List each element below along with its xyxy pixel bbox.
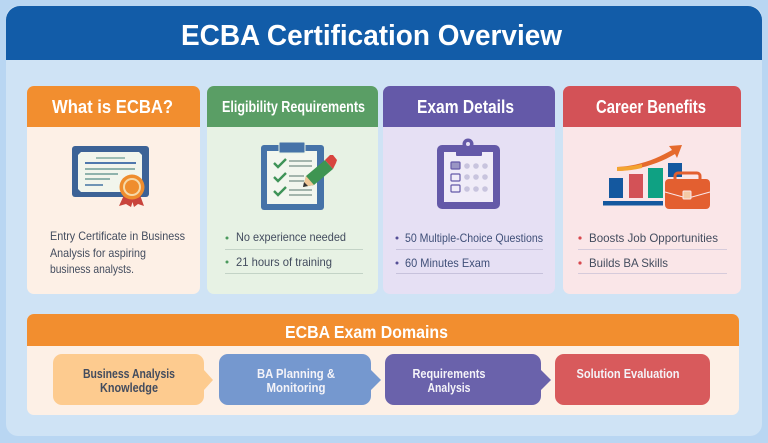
domain: Business Analysis Knowledge: Business Analysis (83, 367, 175, 381)
icon: growth chart and briefcase (603, 145, 710, 209)
text block: ECBA description: business analysts. (50, 262, 134, 276)
heading: ECBA Exam Domains: ECBA Exam Domains (285, 322, 448, 342)
text block: ECBA description (50, 229, 185, 276)
panel: What is ECBA? (27, 86, 200, 294)
domain: BA Planning and Monitoring: Monitoring (266, 381, 326, 395)
domain: Solution Evaluation: Solution Evaluation (576, 367, 680, 381)
domain: Requirements Analysis (385, 354, 551, 405)
domain: Business Analysis Knowledge: Knowledge (100, 381, 158, 395)
list: career benefits: Builds BA Skills (589, 256, 668, 270)
domain: BA Planning and Monitoring: BA Planning & (257, 367, 335, 381)
domain: Requirements Analysis: Requirements (412, 367, 486, 381)
panel: Exam Details (383, 86, 555, 294)
title: ECBA Certification Overview (181, 20, 562, 52)
panel: Eligibility Requirements (207, 86, 378, 294)
icon: clipboard with pencil (261, 142, 337, 210)
list: eligibility: 21 hours of training (236, 255, 332, 269)
list: career benefits (578, 231, 727, 274)
list: exam details: 50 Multiple-Choice Questions (405, 231, 543, 245)
text block: ECBA description: Analysis for aspiring (50, 246, 146, 260)
list: exam details (396, 231, 543, 274)
icon: exam clipboard (437, 138, 500, 209)
heading: Career Benefits: Career Benefits (596, 97, 706, 117)
list: eligibility (225, 230, 363, 274)
domain: Business Analysis Knowledge (53, 354, 213, 405)
list: exam details: 60 Minutes Exam (405, 256, 490, 270)
panel: Career Benefits (563, 86, 741, 294)
icon: certificate (72, 146, 149, 207)
list: career benefits: Boosts Job Opportunities (589, 231, 718, 245)
heading: Eligibility Requirements: Eligibility Requirements (222, 99, 365, 116)
panel: ECBA Exam Domains (27, 314, 739, 415)
domain: Requirements Analysis: Analysis (428, 381, 471, 395)
text block: ECBA description: Entry Certificate in Business (50, 229, 185, 243)
heading: What is ECBA?: What is ECBA? (52, 96, 173, 117)
title banner (6, 6, 762, 60)
list: eligibility: No experience needed (236, 230, 346, 244)
domain: BA Planning and Monitoring (219, 354, 381, 405)
domain: Solution Evaluation (555, 354, 710, 405)
heading: Exam Details: Exam Details (417, 97, 514, 117)
